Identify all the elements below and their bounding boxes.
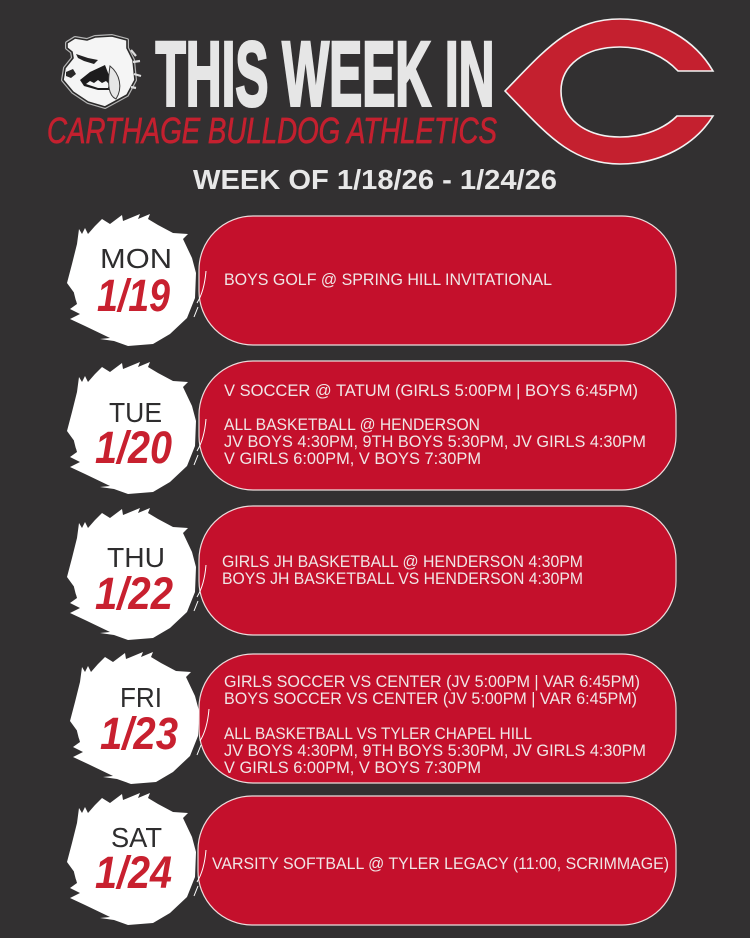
event card: Tuesday: JV BOYS 4:30PM, 9TH BOYS 5:30PM, JV GIRLS 4:30PM (224, 433, 646, 451)
event card: Friday: JV BOYS 4:30PM, 9TH BOYS 5:30PM, JV GIRLS 4:30PM (224, 742, 646, 760)
event card: Friday: ALL BASKETBALL VS TYLER CHAPEL HILL (224, 725, 532, 743)
panel: Thursday (67, 506, 676, 640)
event card: Tuesday (199, 361, 676, 490)
icon: bulldog mascot logo (63, 36, 141, 107)
event card: Monday: BOYS GOLF @ SPRING HILL INVITATIONAL (224, 271, 552, 289)
day badge: Friday: 1/23 (100, 708, 178, 759)
event card: Thursday (199, 506, 676, 635)
icon: red C logo (505, 19, 713, 164)
day badge: Monday (67, 214, 206, 346)
panel: Tuesday (67, 361, 676, 494)
event card: Tuesday: V GIRLS 6:00PM, V BOYS 7:30PM (224, 450, 481, 468)
event card: Tuesday: V SOCCER @ TATUM (GIRLS 5:00PM | BOYS 6:45PM) (224, 382, 638, 400)
day badge: Thursday (67, 508, 206, 640)
day badge: Monday: MON (100, 243, 172, 274)
day badge: Thursday: 1/22 (95, 568, 173, 619)
nose (66, 69, 76, 78)
day badge: Tuesday: 1/20 (95, 422, 172, 473)
event card: Friday: V GIRLS 6:00PM, V BOYS 7:30PM (224, 759, 481, 777)
panel: Friday (70, 652, 676, 784)
panel: Saturday (67, 793, 676, 925)
event card: Tuesday: ALL BASKETBALL @ HENDERSON (224, 416, 480, 434)
snarling mouth (80, 65, 110, 90)
event card: Saturday: VARSITY SOFTBALL @ TYLER LEGACY (11:00, SCRIMMAGE) (212, 855, 669, 873)
day badge: Saturday (67, 793, 206, 925)
event card: Thursday: BOYS JH BASKETBALL VS HENDERSON 4:30PM (222, 570, 583, 588)
event card: Friday: GIRLS SOCCER VS CENTER (JV 5:00PM | VAR 6:45PM) (224, 673, 640, 691)
panel: Monday (67, 214, 676, 346)
collar spikes (131, 50, 141, 88)
day badge: Tuesday: TUE (109, 397, 162, 428)
brow and eye (76, 54, 98, 64)
day badge: Tuesday (67, 362, 206, 494)
event card: Saturday (198, 796, 676, 925)
event card: Monday (199, 216, 676, 345)
day badge: Saturday: 1/24 (95, 847, 172, 898)
subtitle: CARTHAGE BULLDOG ATHLETICS (47, 110, 497, 151)
jowl (109, 66, 120, 99)
event card: Thursday: GIRLS JH BASKETBALL @ HENDERSON 4:30PM (222, 553, 583, 571)
event card: Friday: BOYS SOCCER VS CENTER (JV 5:00PM | VAR 6:45PM) (224, 690, 637, 708)
week range heading: WEEK OF 1/18/26 - 1/24/26 (193, 164, 557, 195)
day badge: Friday: FRI (120, 682, 162, 713)
day badge: Friday (70, 652, 209, 784)
day badge: Thursday: THU (107, 542, 165, 573)
day badge: Saturday: SAT (111, 822, 162, 853)
day badge: Monday: 1/19 (97, 270, 170, 321)
event card: Friday (199, 654, 676, 783)
